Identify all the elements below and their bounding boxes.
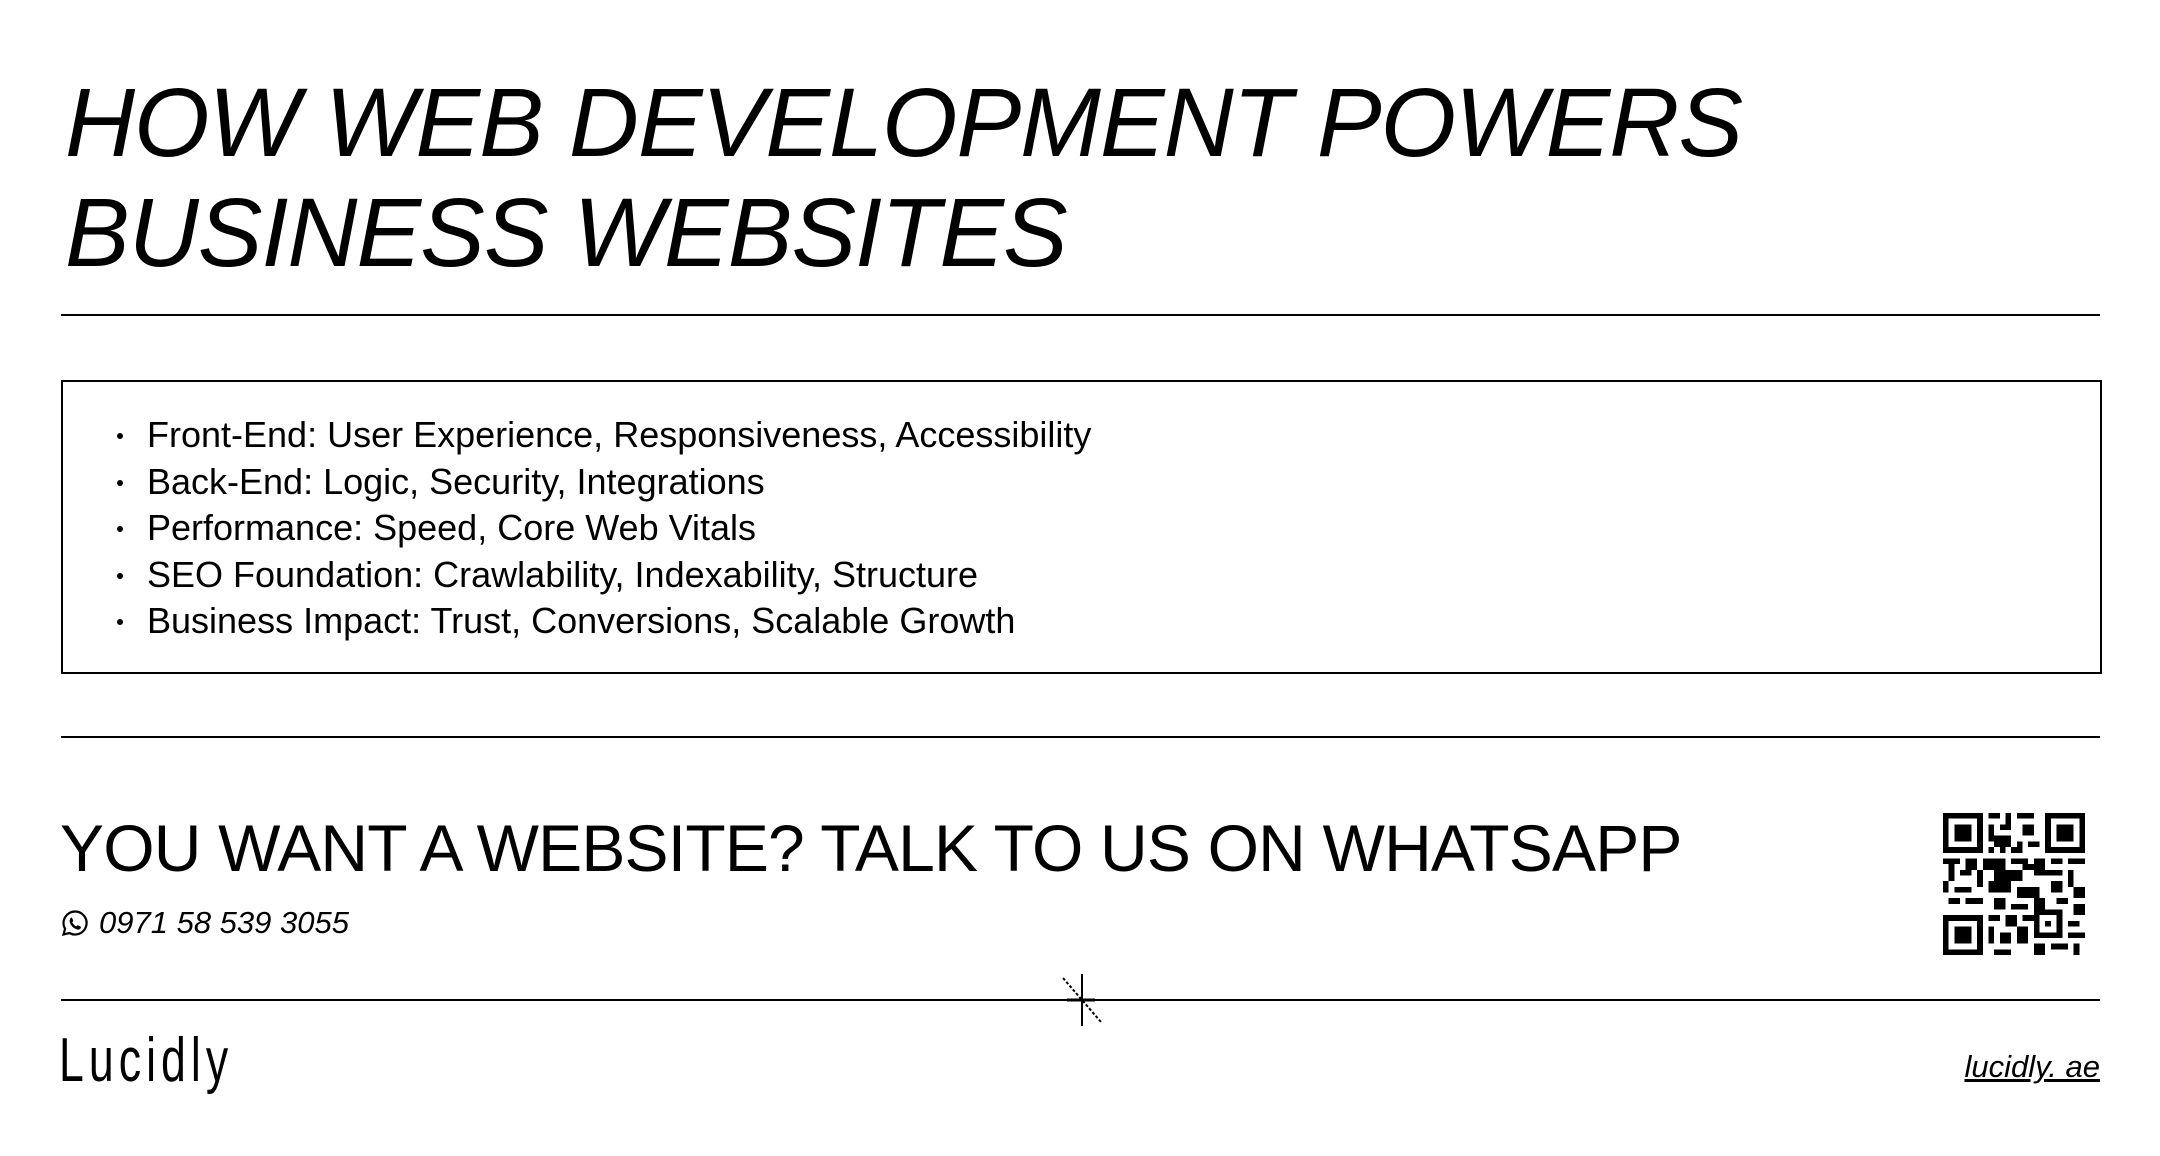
logo: Lucidly: Lucidly: [59, 1026, 233, 1095]
bullet: front-end: Front-End: User Experience, Responsiveness, Accessibility: [147, 414, 1091, 455]
panel: key points: [61, 380, 2102, 674]
bullet: business impact: Business Impact: Trust, Conversions, Scalable Growth: [147, 600, 1015, 641]
website link: lucidly. ae: [1964, 1049, 2100, 1084]
phone number with whatsapp icon: 0971 58 539 3055: [99, 905, 349, 940]
bullet: back-end: Back-End: Logic, Security, Integrations: [147, 460, 765, 502]
icon: whatsapp: [62, 910, 88, 936]
icon: star cross marker: [1062, 974, 1102, 1026]
title: BUSINESS WEBSITES: [65, 178, 1067, 287]
bullet: performance: Performance: Speed, Core Web Vitals: [147, 507, 756, 548]
bullet: seo: SEO Foundation: Crawlability, Indexability, Structure: [147, 554, 978, 594]
qr code: [1943, 813, 2085, 955]
title: [65, 68, 1742, 287]
call to action heading: YOU WANT A WEBSITE? TALK TO US ON WHATSAPP: [60, 811, 1682, 885]
title: HOW WEB DEVELOPMENT POWERS: [65, 68, 1742, 177]
